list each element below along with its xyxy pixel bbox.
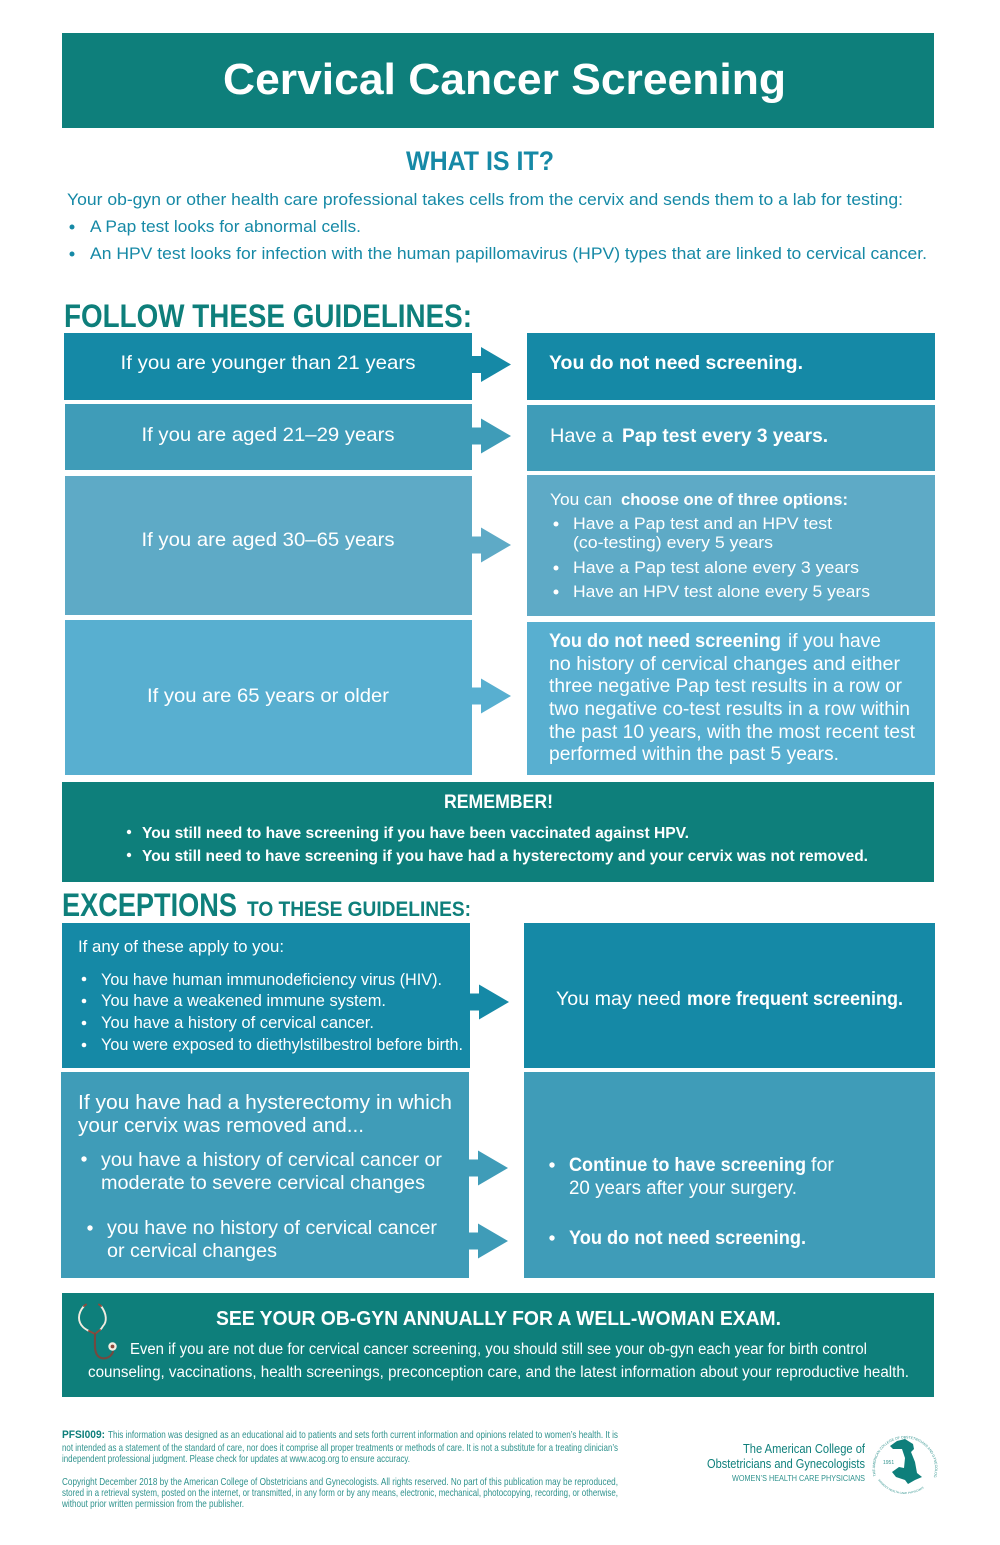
row: aged 30-65: Have a Pap test alone every 3 years xyxy=(573,558,859,577)
heading: exceptions: TO THESE GUIDELINES: xyxy=(247,898,471,921)
logo: acog: Obstetricians and Gynecologists xyxy=(707,1456,865,1471)
arrow xyxy=(469,1150,508,1186)
row: hysterectomy xyxy=(61,1072,935,1278)
section: what is it xyxy=(67,146,927,263)
arrow xyxy=(472,347,511,382)
text: well-woman body xyxy=(88,1341,909,1381)
icon: stethoscope xyxy=(79,1304,117,1358)
arrow xyxy=(472,418,511,454)
footer: disclaimer: PFSI009: xyxy=(62,1429,105,1441)
row: aged 30-65: Have an HPV test alone every 5 years xyxy=(573,582,870,601)
icon: seal: 1951 xyxy=(883,1460,894,1466)
heading: remember: REMEMBER! xyxy=(444,791,553,813)
panel: remember: You still need to have screening if you have been vaccinated against HPV. xyxy=(142,825,689,842)
row: 65 or older: if you have xyxy=(788,631,881,652)
icon: seal: WOMEN’S HEALTH CARE PHYSICIANS xyxy=(878,1478,924,1494)
row: aged 21-29: Have a xyxy=(550,425,613,447)
footer: disclaimer xyxy=(61,1429,618,1510)
row: 65 or older: three negative Pap test results in a row or xyxy=(549,676,903,697)
heading: exceptions: EXCEPTIONS xyxy=(62,887,237,923)
row: exception conditions: You have human immunodeficiency virus (HIV). xyxy=(101,971,442,989)
footer: disclaimer: independent professional judgment. Please check for updates at www.acog.org to ensure accuracy. xyxy=(62,1453,410,1465)
row: aged 30-65: choose one of three options: xyxy=(621,490,848,509)
arrow xyxy=(472,678,511,714)
heading: what is it: WHAT IS IT? xyxy=(406,146,554,176)
row: 65 or older: two negative co-test results in a row within xyxy=(549,699,910,720)
row: exception conditions: You have a history of cervical cancer. xyxy=(101,1014,374,1032)
row: exception conditions: You were exposed to diethylstilbestrol before birth. xyxy=(101,1036,463,1054)
arrow xyxy=(470,984,509,1020)
row: exception conditions xyxy=(62,923,935,1068)
text: well-woman body: counseling, vaccinations, health screenings, preconception care, and the latest information about your reproductive health. xyxy=(88,1364,909,1381)
row: hysterectomy: you have no history of cervical cancer xyxy=(107,1218,438,1239)
footer: disclaimer: This information was designed as an educational aid to patients and sets forth current information and opinions related to women’s health. It is xyxy=(108,1429,618,1441)
row: hysterectomy: If you have had a hysterectomy in which xyxy=(78,1092,452,1114)
row: 65 or older: performed within the past 5 years. xyxy=(549,744,839,765)
text: well-woman body: Even if you are not due for cervical cancer screening, you should still see your ob-gyn each year for birth control xyxy=(130,1341,867,1358)
heading: follow these guidelines: FOLLOW THESE GUIDELINES: xyxy=(64,298,472,334)
bullet: hpv test: An HPV test looks for infection with the human papillomavirus (HPV) types that are linked to cervical cancer. xyxy=(90,244,927,263)
row: aged 30-65: (co-testing) every 5 years xyxy=(573,533,773,552)
footer: disclaimer: Copyright December 2018 by the American College of Obstetricians and Gynecologists. All rights reserved. No part of this publication may be reproduced, xyxy=(62,1476,618,1488)
row: 65 or older: You do not need screening xyxy=(549,631,781,652)
row: 65 or older xyxy=(65,620,935,775)
row: exception conditions: You have a weakened immune system. xyxy=(101,992,386,1010)
row: younger than 21: If you are younger than 21 years xyxy=(120,352,416,374)
row: hysterectomy: moderate to severe cervical changes xyxy=(101,1173,425,1194)
text: intro: Your ob-gyn or other health care professional takes cells from the cervix and sends them to a lab for testing: xyxy=(67,190,903,209)
footer: disclaimer: stored in a retrieval system, posted on the internet, or transmitted, in any form or by any means, electronic, mechanical, photocopying, recording, or otherwise, xyxy=(62,1487,618,1499)
heading: exceptions xyxy=(62,887,471,923)
title: Cervical Cancer Screening xyxy=(223,55,786,104)
logo: acog: WOMEN’S HEALTH CARE PHYSICIANS xyxy=(732,1474,865,1483)
row: hysterectomy: your cervix was removed and... xyxy=(78,1115,364,1137)
row: exception conditions: If any of these apply to you: xyxy=(78,938,284,956)
row: aged 30-65 xyxy=(65,475,935,616)
bullet: pap test: A Pap test looks for abnormal cells. xyxy=(90,217,361,236)
row: 65 or older: the past 10 years, with the most recent test xyxy=(549,722,916,743)
panel: well-woman exam xyxy=(62,1293,934,1397)
icon: seal: THE AMERICAN COLLEGE OF OBSTETRICIANS AND GYNECOLOGISTS xyxy=(872,1436,938,1478)
row: hysterectomy: Continue to have screening xyxy=(569,1155,806,1176)
row: 65 or older: If you are 65 years or older xyxy=(147,685,390,707)
row: aged 21-29: If you are aged 21–29 years xyxy=(142,424,395,446)
footer: disclaimer: not intended as a statement of the standard of care, nor does it comprise all proper treatments or methods of care. It is not a substitute for a treating clinician’s xyxy=(62,1442,618,1454)
footer: disclaimer: without prior written permission from the publisher. xyxy=(61,1498,244,1510)
logo: acog: The American College of xyxy=(743,1441,865,1456)
row: hysterectomy: you have a history of cervical cancer or xyxy=(101,1150,443,1171)
row: exception conditions: You may need xyxy=(556,989,681,1010)
title banner xyxy=(62,33,934,128)
panel: remember: You still need to have screening if you have had a hysterectomy and your cervix was not removed. xyxy=(142,848,868,865)
row: younger than 21 xyxy=(64,333,935,400)
row: aged 30-65: If you are aged 30–65 years xyxy=(142,529,395,551)
row: younger than 21: You do not need screening. xyxy=(549,352,803,374)
row: hysterectomy: 20 years after your surgery. xyxy=(569,1178,797,1199)
row: 65 or older: no history of cervical changes and either xyxy=(549,654,901,675)
row: aged 21-29: Pap test every 3 years. xyxy=(622,425,828,447)
row: hysterectomy: You do not need screening. xyxy=(569,1228,806,1249)
row: hysterectomy: for xyxy=(811,1155,835,1176)
arrow xyxy=(472,528,511,562)
row: hysterectomy: or cervical changes xyxy=(107,1241,277,1262)
row: exception conditions: more frequent screening. xyxy=(687,989,903,1010)
row: aged 21-29 xyxy=(65,404,935,471)
row: aged 30-65: Have a Pap test and an HPV test xyxy=(573,514,832,533)
row: aged 30-65: You can xyxy=(550,490,612,509)
heading: see your ob-gyn: SEE YOUR OB-GYN ANNUALLY FOR A WELL-WOMAN EXAM. xyxy=(216,1308,781,1330)
arrow xyxy=(469,1224,508,1258)
panel: remember xyxy=(62,782,934,882)
